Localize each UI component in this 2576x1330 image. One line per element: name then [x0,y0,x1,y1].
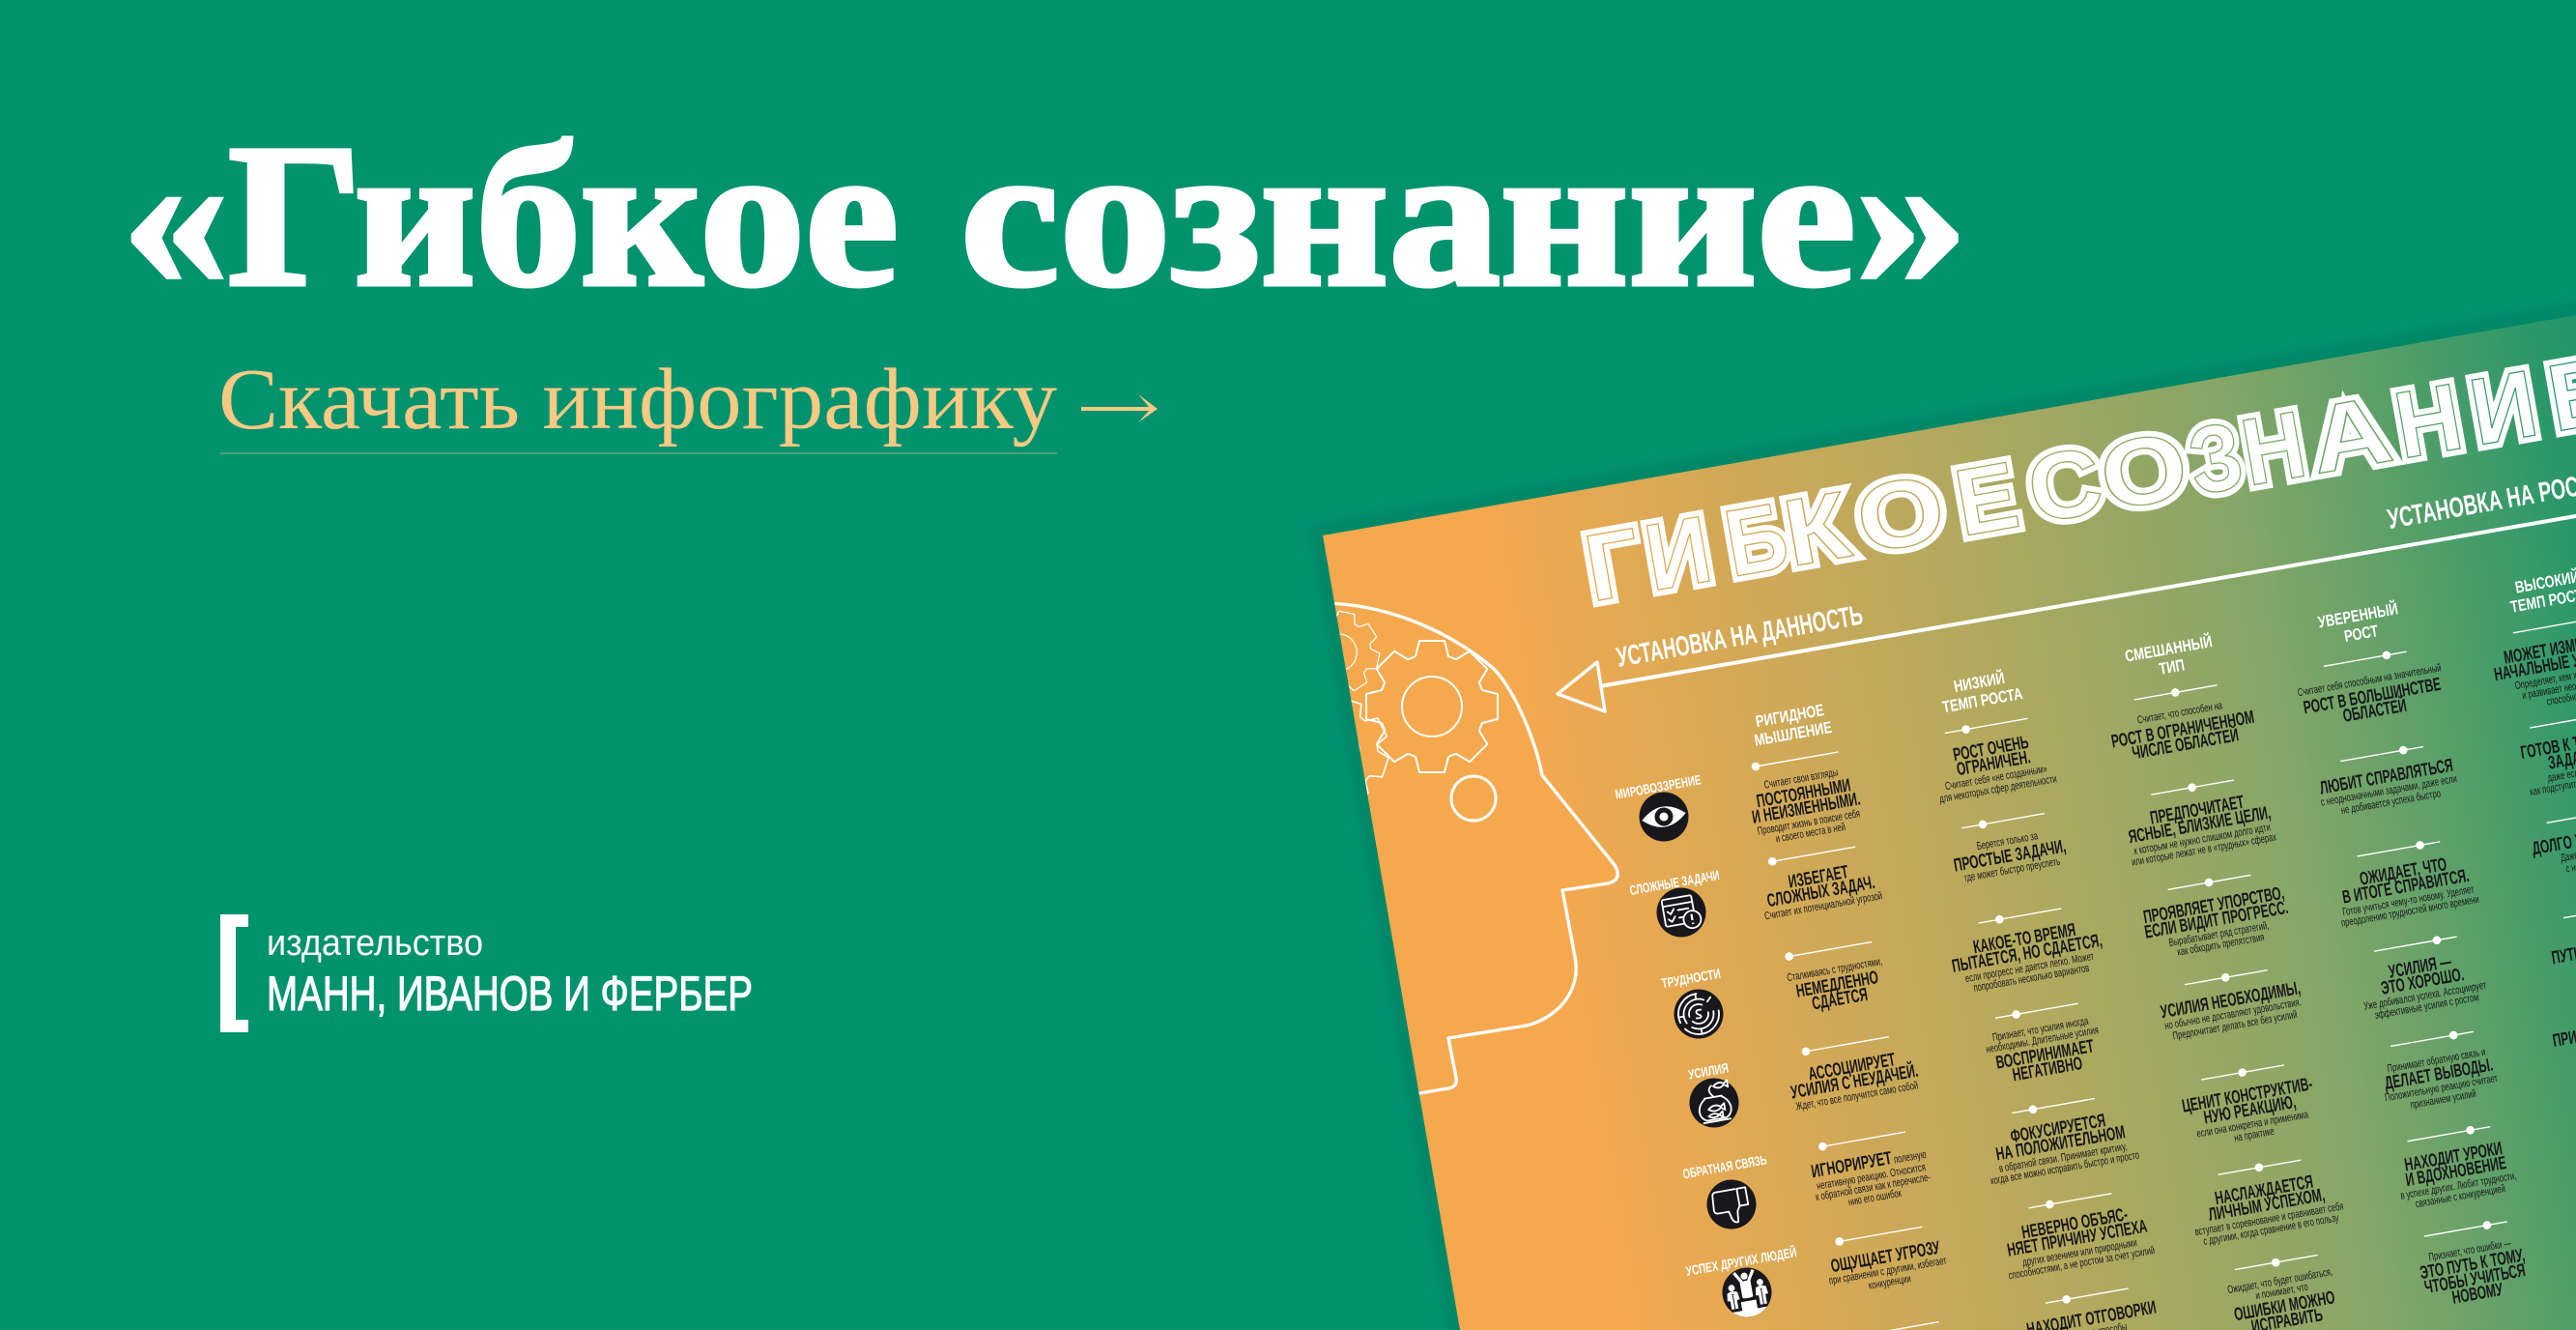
cell: col 3 row 1: ЧИСЛЕ ОБЛАСТЕЙ [2131,723,2241,764]
cell: col 3 row 3: как обходить препятствия [2176,932,2265,959]
cell: col 4 row 4: УСИЛИЯ — [2387,952,2453,982]
cell: col 4 row 1: РОСТ В БОЛЬШИНСТВЕ [2302,675,2443,718]
cell: col 3 row 5: если она конкретна и применима [2195,1109,2309,1141]
poster gradient background [1311,243,2576,1330]
cell: col 2 row 5: ФОКУСИРУЕТСЯ [2009,1112,2107,1147]
cell: col 4 row 1: ОБЛАСТЕЙ [2341,694,2408,727]
cell: col 1 row 5: ИГНОРИРУЕТ полезную [1810,1142,1928,1182]
cell: col 3 row 5: ЦЕНИТ КОНСТРУКТИВ- [2181,1075,2314,1117]
cell: col 3 row 2: ПРЕДПОЧИТАЕТ [2149,793,2246,828]
icon: thought circle [1451,776,1496,821]
publisher name: МАНН, ИВАНОВ И ФЕРБЕР [267,967,753,1021]
cell: col 4 row 6: НАХОДИТ УРОКИ [2403,1139,2504,1175]
cell: col 2 row 5: НА ПОЛОЖИТЕЛЬНОМ [1994,1123,2127,1165]
cell: col 3 row 1 [2104,676,2258,767]
cell: col 4 row 5: Положительную реакцию считает [2384,1072,2499,1105]
cell: col 2 row 2: где может быстро преуспеть [1963,855,2061,884]
cell: col 5 row 4 [2544,896,2576,981]
cell: col 3 row 2: к которым не нужно слишком долго идти [2132,822,2272,858]
cell: col 4 row 6 [2390,1119,2519,1213]
column header: high growth [2505,565,2576,617]
cell: col 4 row 7: НОВОМУ [2450,1280,2505,1309]
poster title: И [2463,350,2544,466]
cell: col 1 row 4: АССОЦИИРУЕТ [1807,1050,1897,1084]
cell: col 2 row 1 [1928,711,2058,806]
poster title: И [2463,350,2544,466]
icon: large gear [1366,641,1498,772]
cell: col 1 row 5: к обратной связи как к перечисле- [1815,1171,1932,1204]
poster title: З [2181,401,2250,515]
cell: col 2 row 3 [1945,898,2107,998]
poster title: Н [2234,390,2313,506]
poster title: О [2092,411,2195,531]
cell: col 4 row 6: связанные с конкуренцией [2415,1183,2506,1211]
cell: col 3 row 6: ЛИЧНЫМ УСПЕХОМ, [2207,1186,2327,1226]
cell: col 3 row 3: ЕСЛИ ВИДИТ ПРОГРЕСС. [2143,898,2290,942]
main title: сознание» [960,102,1967,329]
cell: col 4 row 5: Принимает обратную связь и [2387,1046,2486,1076]
icon: fish bowl [1689,1079,1739,1127]
cell: col 5 row 1 [2487,610,2576,717]
column header: slow growth: ТЕМП РОСТА [1941,684,2024,717]
cell: col 4 row 7 [2413,1216,2532,1314]
icon: checklist with warning [1656,887,1706,938]
cell: col 3 row 1: РОСТ В ОГРАНИЧЕННОМ [2110,708,2256,752]
cell: col 1 row 2: Считает их потенциальной угрозой [1763,890,1883,923]
cell: col 2 row 3: ПЫТАЕТСЯ, НО СДАЕТСЯ, [1951,931,2104,977]
cell: col 1 row 4: Ждет, что все получится само собой [1795,1080,1919,1113]
cell: col 3 row 4: но обычно не доставляют удовольствия. [2163,997,2303,1032]
poster title: Н [2234,390,2313,506]
column header: mixed type: СМЕШАННЫЙ [2124,631,2214,666]
cell: col 4 row 3: преодолению трудностей много времени [2340,893,2480,930]
poster title: К [1776,471,1858,587]
cell: col 3 row 7: и понимает, что [2254,1281,2309,1303]
cell: col 3 row 2 [2120,770,2277,869]
main title: «Гибкое [123,102,899,329]
cell: col 2 row 1: для некоторых сфер деятельности [1938,773,2058,806]
cell: col 4 row 3: В ИТОГЕ СПРАВИТСЯ. [2341,866,2471,908]
poster title: Е [1948,442,2026,557]
poster shadow [1323,315,2576,1330]
poster title [1580,356,2576,608]
cell: col 1 row 5 [1807,1125,1933,1214]
column header: mixed type: ТИП [2158,656,2186,679]
cell: col 1 row 3 [1783,937,1889,1018]
arrow: scale from fixed to growth mindset [1558,510,2576,711]
cell: col 1 row 5: нию его ошибок [1847,1187,1903,1209]
cell: col 4 row 4: Уже добивался успеха. Ассоциирует [2362,979,2488,1013]
cell: col 2 row 6: НЕВЕРНО ОБЪЯС- [2020,1205,2130,1243]
cell: col 1 row 6: конкуренции [1868,1273,1912,1292]
cell: col 3 row 6 [2185,1150,2346,1250]
cell: col 3 row 5: НУЮ РЕАКЦИЮ, [2202,1092,2298,1128]
cell: col 4 row 7: Признает, что ошибки — [2428,1237,2512,1264]
cell: col 2 row 6: НЯЕТ ПРИЧИНУ УСПЕХА [2006,1217,2149,1260]
label: fixed mindset: УСТАНОВКА НА ДАННОСТЬ [1615,600,1865,674]
cell: col 2 row 4: НЕГАТИВНО [2011,1054,2084,1085]
cell: col 3 row 6: вступает в соревнование и сравнивает себя [2194,1200,2344,1239]
cell: col 3 row 6: с другими, когда сравнение в его пользу [2202,1212,2340,1248]
cell: col 2 row 1: ОГРАНИЧЕН. [1955,748,2032,780]
cell: col 1 row 7 [1851,1317,1939,1330]
cell: col 2 row 6: других везением или природными [2021,1237,2138,1269]
row label: worldview: МИРОВОЗЗРЕНИЕ [1614,771,1703,802]
cell: col 2 row 1: РОСТ ОЧЕНЬ [1952,733,2030,766]
poster [1323,315,2576,1330]
cell: col 1 row 1: Считает свои взгляды [1763,766,1839,792]
icon: eye [1639,793,1689,841]
cell: col 2 row 5 [1979,1088,2140,1188]
column header: rigid thinking [1755,704,1832,746]
column header: slow growth [1942,669,2023,712]
poster title: И [1638,497,1719,612]
cell: col 1 row 1: Проводит жизнь в поиске себя [1757,808,1861,838]
poster title: А [2302,375,2399,494]
cell: col 4 row 4 [2354,929,2490,1024]
poster title: К [1776,471,1858,587]
cell: col 4 row 5 [2376,1025,2501,1116]
cell: col 1 row 1: И НЕИЗМЕННЫМИ. [1751,790,1862,828]
cell: col 3 row 4 [2156,961,2305,1044]
cell: col 5 row 2 [2516,707,2576,799]
table: mindset grid [1725,560,2576,1330]
cell: col 3 row 3: Вырабатывает ряд стратегий, [2168,920,2270,950]
cell: col 2 row 2 [1947,807,2070,886]
cell: col 3 row 4: УСИЛИЯ НЕОБХОДИМЫ, [2160,979,2303,1023]
column header: confident growth: РОСТ [2343,622,2380,647]
poster title: Б [1717,481,1795,597]
poster title: О [1848,454,1953,573]
cell: col 3 row 5: на практике [2233,1125,2275,1144]
cell: col 4 row 2: не добивается успеха быстро [2340,788,2442,818]
cell: col 4 row 4: эффективные усилия с ростом [2374,992,2480,1022]
cell: col 4 row 2 [2314,737,2460,821]
cell: col 2 row 4: Признает, что усилия иногда [1991,1015,2090,1045]
icon: maze [1674,990,1724,1038]
row label: success of others: УСПЕХ ДРУГИХ ЛЮДЕЙ [1684,1243,1798,1279]
cell: col 2 row 7 [2022,1280,2160,1330]
publisher logo [220,914,753,1032]
cell: col 2 row 2: Берется только за [1976,830,2040,853]
row label: feedback: ОБРАТНАЯ СВЯЗЬ [1681,1151,1768,1182]
cell: col 4 row 6: И ВДОХНОВЕНИЕ [2404,1153,2508,1191]
icon: people on podium [1722,1268,1772,1316]
cell: col 1 row 2: ИЗБЕГАЕТ [1787,862,1850,892]
cell: col 1 row 3: НЕМЕДЛЕННО [1794,968,1880,1001]
download link: Скачать инфографику [218,352,1057,448]
poster title: О [2092,411,2195,531]
cell: col 3 row 7: ОШИБКИ МОЖНО [2233,1288,2336,1325]
cell: col 2 row 3: КАКОЕ-ТО ВРЕМЯ [1972,920,2077,958]
column header: slow growth: НИЗКИЙ [1952,668,2006,696]
column header: rigid thinking: РИГИДНОЕ [1755,701,1825,732]
cell: col 4 row 4: ЭТО ХОРОШО. [2380,965,2466,999]
column header: confident growth: УВЕРЕННЫЙ [2316,599,2399,632]
cell: col 3 row 3 [2137,866,2294,964]
cell: col 2 row 3: если прогресс не дается легко. Может [1964,950,2096,986]
icon: upper gear [1336,611,1380,692]
cell: col 4 row 7: ЭТО ПУТЬ К ТОМУ, [2419,1246,2527,1284]
cell: col 3 row 5 [2177,1056,2321,1153]
cell: col 4 row 5: ДЕЛАЕТ ВЫВОДЫ. [2383,1055,2495,1094]
poster title: Г [1578,507,1648,622]
poster title: Б [1717,481,1795,597]
cell: col 2 row 5: когда все можно исправить быстро и просто [1989,1149,2140,1188]
cell: col 3 row 6: НАСЛАЖДАЕТСЯ [2214,1172,2315,1209]
publisher tagline: издательство [267,923,483,964]
cell: col 4 row 5: признанием усилий [2410,1088,2477,1112]
cell: col 1 row 1 [1743,745,1866,849]
head silhouette [1333,601,1619,1095]
cell: col 5 row 3 [2528,800,2576,881]
poster title: С [2020,427,2109,544]
icon: lower gear [1351,700,1389,795]
cell: col 2 row 4: необходимы. Длительные усилия [1985,1025,2100,1056]
cell: col 4 row 1: Считает себя способным на значительный [2297,662,2443,700]
cell: col 1 row 4 [1784,1028,1922,1113]
cell: col 2 row 4: ВОСПРИНИМАЕТ [1994,1037,2096,1073]
poster title: З [2181,401,2250,515]
cell: col 1 row 1: и своего места в ней [1775,821,1846,846]
row label: difficulties: ТРУДНОСТИ [1660,966,1722,991]
poster title: И [1638,497,1719,612]
cell: col 3 row 2: или которые лежат не в «трудных» сферах [2131,831,2277,869]
cell: col 4 row 7: ЧТОБЫ УЧИТЬСЯ [2423,1261,2527,1298]
cell: col 4 row 2: ЛЮБИТ СПРАВЛЯТЬСЯ [2318,756,2454,798]
cell: col 3 row 2: ЯСНЫЕ, БЛИЗКИЕ ЦЕЛИ, [2127,803,2273,848]
cell: col 2 row 6 [1997,1184,2156,1283]
cell: col 3 row 4: Предпочитает делать все без усилий [2172,1009,2299,1043]
row label: hard tasks: СЛОЖНЫЕ ЗАДАЧИ [1628,867,1721,898]
cell: col 1 row 3: СДАЕТСЯ [1811,985,1870,1014]
icon: download arrow [1081,394,1158,422]
column header: rigid thinking: МЫШЛЕНИЕ [1753,718,1833,750]
cell: col 1 row 1: ПОСТОЯННЫМИ [1755,776,1852,812]
cell: col 4 row 6: в успехе других. Любит трудности, [2399,1170,2517,1202]
cell: col 1 row 2 [1755,840,1883,923]
cell: col 2 row 6: способностями, а не ростом за счет усилий [2008,1245,2156,1283]
logo bracket [220,914,248,1032]
cell: col 1 row 5: негативную реакцию. Относится [1816,1162,1927,1193]
cell: col 1 row 2: СЛОЖНЫХ ЗАДАЧ. [1765,873,1876,911]
cell: col 1 row 6 [1821,1220,1950,1299]
cell: col 1 row 3: Сталкиваясь с трудностями, [1786,956,1883,985]
cell: col 2 row 4 [1980,997,2105,1089]
cell: col 1 row 6: ОЩУЩАЕТ УГРОЗУ [1829,1238,1942,1277]
cell: col 2 row 1: Считает себя «не созданным» [1944,763,2048,794]
cell: col 1 row 6: при сравнении с другими, избегает [1828,1255,1948,1287]
cell: col 4 row 3: ОЖИДАЕТ, ЧТО [2359,855,2448,889]
cell: col 4 row 1 [2293,642,2448,734]
cell: col 1 row 4: УСИЛИЯ С НЕУДАЧЕЙ. [1789,1059,1920,1103]
cell: col 2 row 3: попробовать несколько вариантов [1973,962,2090,995]
cell: col 4 row 3 [2330,832,2480,930]
cell: col 4 row 2: с неоднозначными задачами, даже если [2320,773,2458,809]
cell: col 3 row 3: ПРОЯВЛЯЕТ УПОРСТВО, [2142,883,2286,928]
icon: thumbs down [1706,1179,1757,1229]
cell: col 3 row 1: Считает, что способен на [2136,700,2224,727]
cell: col 2 row 5: в обратной связи. Принимает критику, [1998,1141,2128,1175]
poster title: Н [2388,363,2470,479]
poster title: Г [1578,507,1648,622]
main title [123,102,1967,329]
cell: col 3 row 7 [2223,1249,2341,1330]
cell: col 2 row 2: ПРОСТЫЕ ЗАДАЧИ, [1953,837,2068,876]
column header: confident growth [2316,599,2403,651]
poster title: Е [1948,442,2026,557]
poster title: О [1848,454,1953,573]
poster title: Н [2388,363,2470,479]
poster title: С [2020,427,2109,544]
cell: col 3 row 7: Ожидает, что будет ошибаться, [2226,1266,2333,1297]
poster title: А [2302,375,2399,494]
cell: col 4 row 3: Готов учиться чему-то новому. Уделяет [2341,883,2476,919]
podium [1733,1299,1767,1316]
row label: effort: УСИЛИЯ [1687,1059,1730,1083]
